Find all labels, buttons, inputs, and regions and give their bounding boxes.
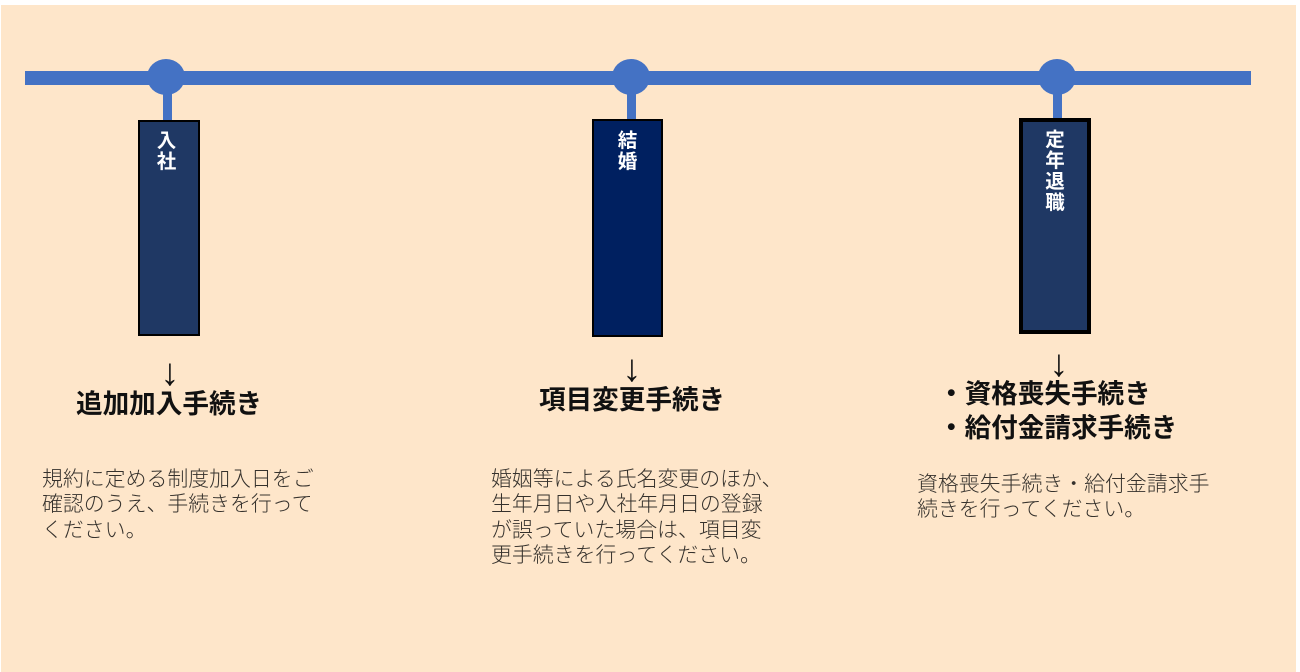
description: 追加加入手続き: 規約に定める制度加入日をご xyxy=(42,468,314,491)
label box: 定年退職: 職 xyxy=(1045,192,1065,214)
label box: 入社 xyxy=(138,120,200,336)
timeline bar xyxy=(25,71,1251,85)
description: 項目変更手続き: が誤っていた場合は、項目変 xyxy=(491,519,762,542)
heading: 項目変更手続き: 項目変更手続き xyxy=(539,385,725,415)
connector: 結婚 xyxy=(627,92,636,120)
label box: 定年退職 xyxy=(1019,118,1091,334)
arrow: 定年退職: ↓ xyxy=(1050,343,1068,385)
description: 資格喪失手続き・給付金請求手続き: 資格喪失手続き・給付金請求手 xyxy=(917,473,1209,496)
arrow: 入社: ↓ xyxy=(160,352,180,394)
description: 項目変更手続き: 生年月日や入社年月日の登録 xyxy=(491,493,763,516)
description: 資格喪失手続き・給付金請求手続き: 続きを行ってください。 xyxy=(917,498,1145,521)
label box: 定年退職: 定 xyxy=(1045,129,1065,151)
heading: 資格喪失手続き・給付金請求手続き: ・資格喪失手続き xyxy=(938,379,1151,409)
heading: 資格喪失手続き・給付金請求手続き: ・給付金請求手続き xyxy=(938,413,1177,443)
description: 項目変更手続き xyxy=(491,468,782,567)
milestone marker: 定年退職 xyxy=(1038,59,1076,95)
label box: 定年退職: 年 xyxy=(1045,150,1065,172)
timeline xyxy=(25,59,1251,120)
heading: 資格喪失手続き・給付金請求手続き xyxy=(938,379,1177,443)
label box: 結婚 xyxy=(592,119,663,337)
label box: 定年退職: 退 xyxy=(1045,171,1065,193)
connector: 定年退職 xyxy=(1053,92,1062,119)
milestone marker: 結婚 xyxy=(612,59,650,95)
milestone marker: 入社 xyxy=(147,59,185,95)
heading: 追加加入手続き: 追加加入手続き xyxy=(76,389,262,419)
label box: 入社: 社 xyxy=(157,151,176,173)
connector: 入社 xyxy=(163,92,172,121)
label box: 結婚: 結 xyxy=(618,130,637,152)
description: 項目変更手続き: 婚姻等による氏名変更のほか、 xyxy=(491,468,782,491)
label box: 結婚: 婚 xyxy=(618,151,637,173)
description: 追加加入手続き: 確認のうえ、手続きを行って xyxy=(42,493,313,516)
description: 項目変更手続き: 更手続きを行ってください。 xyxy=(491,544,761,567)
arrow: 結婚: ↓ xyxy=(622,348,642,390)
description: 追加加入手続き: ください。 xyxy=(42,519,146,542)
description: 資格喪失手続き・給付金請求手続き xyxy=(917,473,1209,521)
description: 追加加入手続き xyxy=(42,468,314,542)
label box: 入社: 入 xyxy=(157,130,176,152)
